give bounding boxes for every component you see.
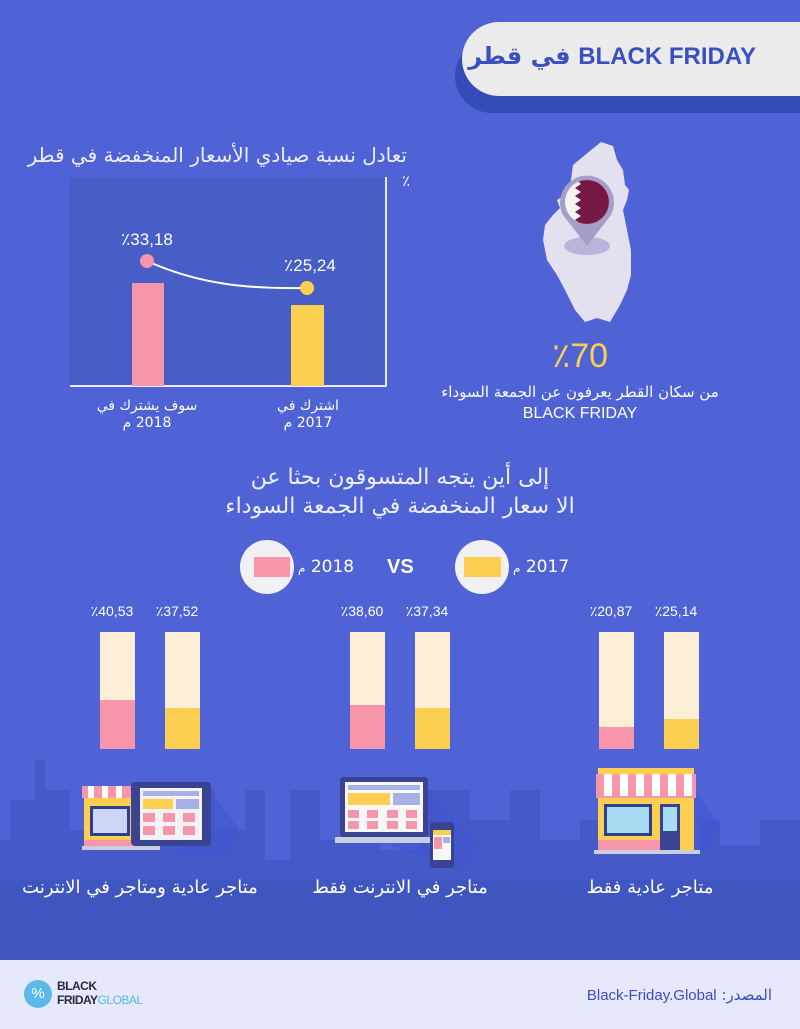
legend: 2018 م (298, 557, 354, 577)
footer (0, 960, 800, 1029)
logo: % (31, 985, 45, 1002)
category labels: متاجر عادية ومتاجر في الانترنت (22, 877, 258, 898)
section heading (225, 462, 575, 519)
text: ٪25,24 (284, 256, 336, 275)
x labels: 2018 م (123, 415, 171, 431)
header pill (455, 39, 800, 113)
line chart panel (70, 177, 387, 387)
logo (24, 979, 143, 1008)
axis unit: ٪ (402, 173, 410, 190)
stat caption: من سكان القطر يعرفون عن الجمعة السوداء (441, 383, 719, 401)
icon: Qatar map with pin (543, 142, 631, 322)
chart title: تعادل نسبة صيادي الأسعار المنخفضة في قطر (28, 143, 407, 167)
bar group: offline only (590, 603, 699, 749)
section heading: الا سعار المنخفضة في الجمعة السوداء (225, 494, 575, 519)
section heading: إلى أين يتجه المتسوقون بحثا عن (251, 465, 549, 490)
x labels (97, 398, 197, 431)
stat: 70%: ٪70 (552, 337, 608, 375)
bar 2017 (291, 305, 324, 386)
text: 2017 م (284, 415, 332, 431)
icon: shop plus tablet (82, 782, 238, 850)
x labels: سوف يشترك في (97, 398, 197, 414)
value labels: ٪33,18 (121, 230, 173, 249)
bar group: online and offline (91, 603, 200, 749)
bar group: online and offline: ٪37,52 (156, 603, 198, 619)
source: المصدر: Black-Friday.Global (587, 986, 772, 1004)
bar group: online only: ٪38,60 (341, 603, 383, 619)
logo: FRIDAYGLOBAL (57, 993, 143, 1007)
bar group: online only (341, 603, 450, 749)
legend 2018 (240, 540, 294, 594)
logo: BLACK (57, 979, 96, 993)
legend 2017 (455, 540, 509, 594)
bar group: online only: ٪37,34 (406, 603, 448, 619)
text: اشترك في (277, 398, 339, 414)
text: متاجر في الانترنت فقط (312, 877, 488, 898)
legend (240, 540, 569, 594)
icon: laptop plus phone (335, 777, 454, 868)
legend: 2017 م (513, 557, 569, 577)
bar group: offline only: ٪20,87 (590, 603, 632, 619)
text: BLACK FRIDAY (523, 405, 637, 422)
bar 2018 (132, 283, 164, 386)
text: متاجر عادية فقط (587, 877, 713, 898)
bar group: offline only: ٪25,14 (655, 603, 697, 619)
bar group: online and offline: ٪40,53 (91, 603, 133, 619)
icon: shop (594, 768, 716, 854)
VS: VS (387, 556, 414, 578)
title: BLACK FRIDAY في قطر (468, 42, 756, 70)
